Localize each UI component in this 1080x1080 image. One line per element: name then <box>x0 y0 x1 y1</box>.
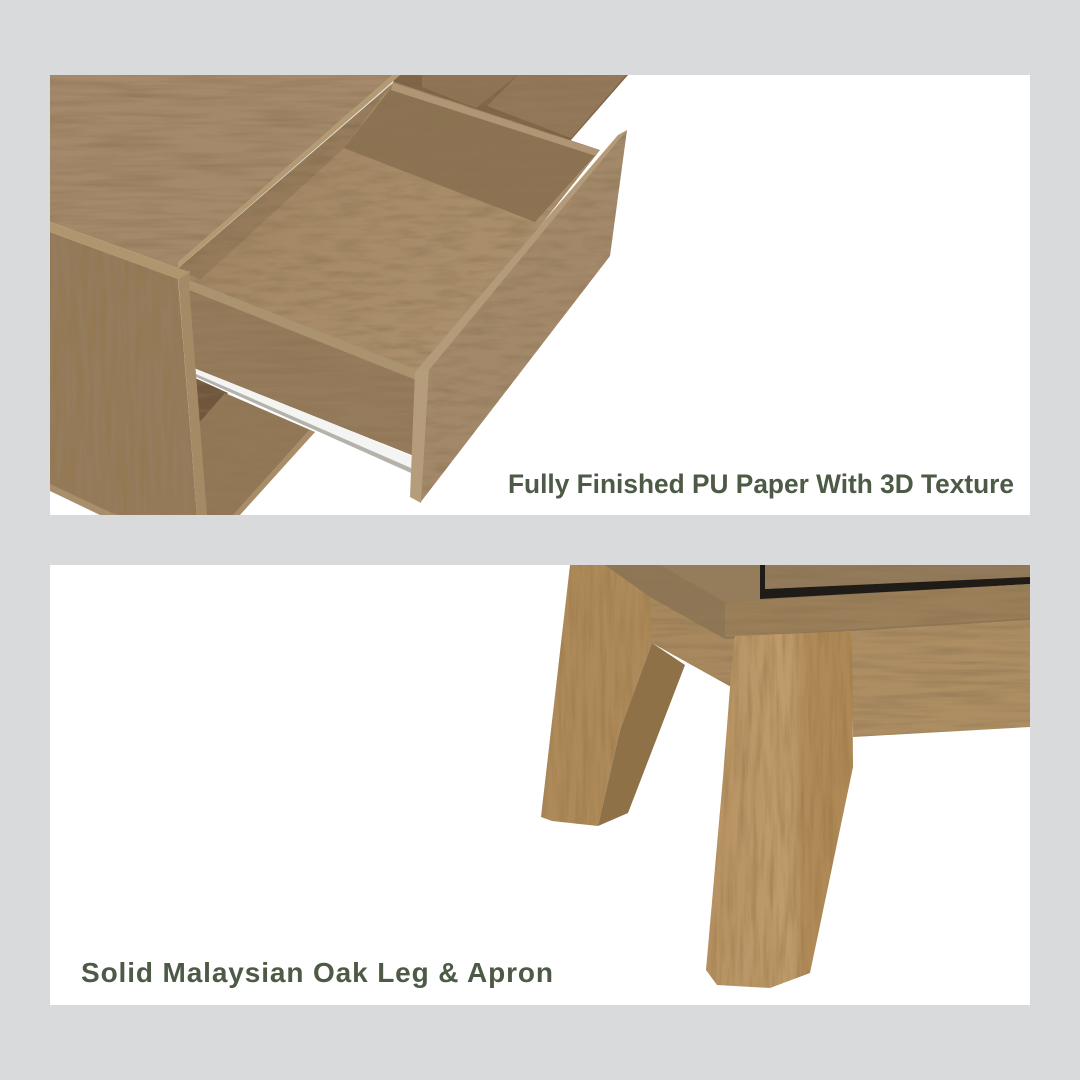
caption: PU paper: Fully Finished PU Paper With 3D Texture <box>508 469 1014 499</box>
table top surface <box>50 75 400 268</box>
panel: PU paper drawer <box>50 75 1030 515</box>
panel background <box>50 75 1030 515</box>
apron right <box>850 610 1030 737</box>
lower shelf <box>195 378 315 515</box>
carcass underlay <box>605 565 1030 639</box>
caption: oak leg: Solid Malaysian Oak Leg & Apron <box>81 957 553 988</box>
front leg <box>706 631 853 988</box>
drawer front <box>765 565 1030 589</box>
side panel <box>50 232 197 515</box>
base front strip <box>725 584 1030 637</box>
side panel bottom edge <box>50 484 118 515</box>
panel: oak leg <box>50 565 1030 1005</box>
apron left <box>650 597 735 688</box>
panel background <box>50 565 1030 1005</box>
rear leg <box>541 565 685 826</box>
carcass base side <box>660 565 760 602</box>
drawer back wall <box>344 86 597 222</box>
drawer near side wall <box>189 288 416 456</box>
floor shadow beside table top <box>178 80 394 280</box>
side panel front edge <box>178 270 207 515</box>
illustration: open drawer unit <box>50 75 628 515</box>
drawer gap <box>760 565 1030 599</box>
drawer front panel <box>410 130 627 503</box>
illustration: legs and apron <box>541 565 1030 988</box>
drawer slide rail <box>195 367 411 473</box>
lower shelf edge <box>233 430 315 515</box>
drawer floor <box>176 82 600 374</box>
rear compartments <box>390 75 628 146</box>
